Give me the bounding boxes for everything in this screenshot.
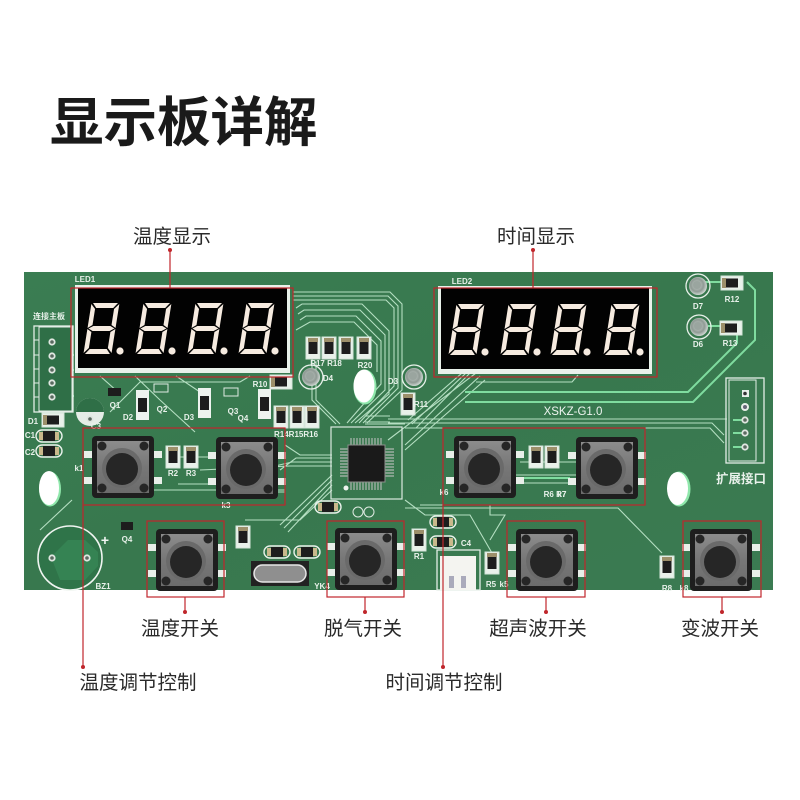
button wave switch	[682, 529, 760, 591]
frame: ultrasonic switch	[507, 521, 585, 597]
silkscreen labels: R17 R18	[310, 359, 342, 368]
display: LED1	[75, 285, 290, 373]
label: 时间显示: 时间显示	[497, 226, 575, 248]
label: 脱气开关: 脱气开关	[324, 618, 402, 640]
label: 温度开关: 温度开关	[141, 618, 219, 640]
frame: temperature adjust buttons	[83, 428, 285, 505]
silkscreen labels: D3	[184, 413, 195, 422]
leader: wave switch	[720, 597, 724, 614]
silkscreen labels: R14R15R16	[274, 430, 319, 439]
leader: ultrasonic switch	[544, 597, 548, 614]
copper traces	[40, 282, 755, 553]
button degas switch	[327, 528, 405, 590]
label: 超声波开关: 超声波开关	[489, 618, 587, 640]
silkscreen labels: R3	[186, 469, 197, 478]
indicator LEDs	[299, 274, 711, 389]
button k3	[208, 437, 286, 499]
silkscreen labels: YK4	[314, 582, 330, 591]
buzzer BZ1	[38, 526, 109, 590]
silkscreen labels: Q3	[228, 407, 239, 416]
annotation frames	[71, 288, 761, 597]
silkscreen labels: Q1	[110, 401, 121, 410]
silkscreen labels: Q4	[122, 535, 133, 544]
button k6	[446, 436, 524, 498]
silkscreen labels: C2	[25, 448, 36, 457]
buzzer BZ1: +	[101, 532, 109, 548]
leader: temperature switch	[183, 597, 187, 614]
button ultrasonic switch	[508, 529, 586, 591]
SMD components	[36, 276, 743, 578]
label: 温度调节控制: 温度调节控制	[79, 672, 197, 694]
crystal oscillator	[251, 561, 309, 586]
frame: time adjust buttons	[443, 428, 645, 505]
frame: degas switch	[327, 521, 404, 597]
frame: LED1	[71, 288, 293, 377]
circuit board	[24, 272, 773, 593]
leader: temperature adjust	[81, 505, 85, 669]
display: LED2	[438, 286, 652, 374]
silkscreen labels: k6	[440, 488, 449, 497]
silkscreen labels: BZ1	[95, 582, 111, 591]
silkscreen labels: D7	[693, 302, 704, 311]
silkscreen labels: R10	[253, 380, 268, 389]
title: 显示板详解	[50, 94, 318, 153]
expansion connector	[716, 378, 766, 486]
silkscreen labels: R8	[662, 584, 673, 593]
silkscreen labels: LED1	[75, 275, 96, 284]
leader: degas switch	[363, 597, 367, 614]
silkscreen labels: k5	[500, 580, 509, 589]
expansion connector: 扩展接口	[716, 471, 766, 486]
leader: time display	[531, 248, 535, 288]
silkscreen labels: D6	[693, 340, 704, 349]
silkscreen labels: k1	[75, 464, 84, 473]
silkscreen labels: k8	[680, 584, 689, 593]
label: 温度显示: 温度显示	[133, 226, 211, 248]
silkscreen labels: D4	[323, 374, 334, 383]
silkscreen labels: R5	[486, 580, 497, 589]
silkscreen labels: R12	[725, 295, 740, 304]
left connector: 连接主板	[33, 311, 65, 321]
silkscreen labels: k3	[222, 501, 231, 510]
silkscreen labels: R2	[168, 469, 179, 478]
electrolytic capacitor C3	[76, 398, 104, 426]
silkscreen labels: LED2	[452, 277, 473, 286]
silkscreen labels: D1	[28, 417, 39, 426]
frame: wave switch	[683, 521, 761, 597]
silkscreen labels: C4	[461, 539, 472, 548]
button temperature switch	[148, 529, 226, 591]
frame: temperature switch	[147, 521, 224, 597]
silkscreen labels: Q4	[238, 414, 249, 423]
silkscreen labels: Q2	[157, 405, 168, 414]
silkscreen labels: k7	[558, 490, 567, 499]
label: 变波开关: 变波开关	[681, 618, 759, 640]
silkscreen labels: R6 R7	[544, 490, 567, 499]
frame: LED2	[434, 288, 657, 377]
leader: temperature display	[168, 248, 172, 288]
silkscreen labels: XSKZ-G1.0	[544, 406, 602, 418]
silkscreen labels: R13	[723, 339, 738, 348]
mounting slots	[39, 370, 690, 506]
left connector	[33, 311, 73, 412]
silkscreen labels: R1	[414, 552, 425, 561]
leader: time adjust	[441, 505, 445, 669]
silkscreen labels	[25, 275, 740, 593]
button k1	[84, 436, 162, 498]
silkscreen labels: C3	[91, 422, 102, 431]
label: 时间调节控制: 时间调节控制	[385, 672, 503, 694]
white JST connector	[437, 550, 480, 590]
silkscreen labels: D3	[388, 377, 399, 386]
silkscreen labels: C1	[25, 431, 36, 440]
silkscreen labels: R11	[414, 400, 429, 409]
button k7	[568, 437, 646, 499]
board substrate	[24, 272, 773, 590]
microcontroller chip	[331, 427, 402, 499]
silkscreen labels: R20	[358, 361, 373, 370]
silkscreen labels: D2	[123, 413, 134, 422]
tactile buttons	[84, 436, 760, 591]
